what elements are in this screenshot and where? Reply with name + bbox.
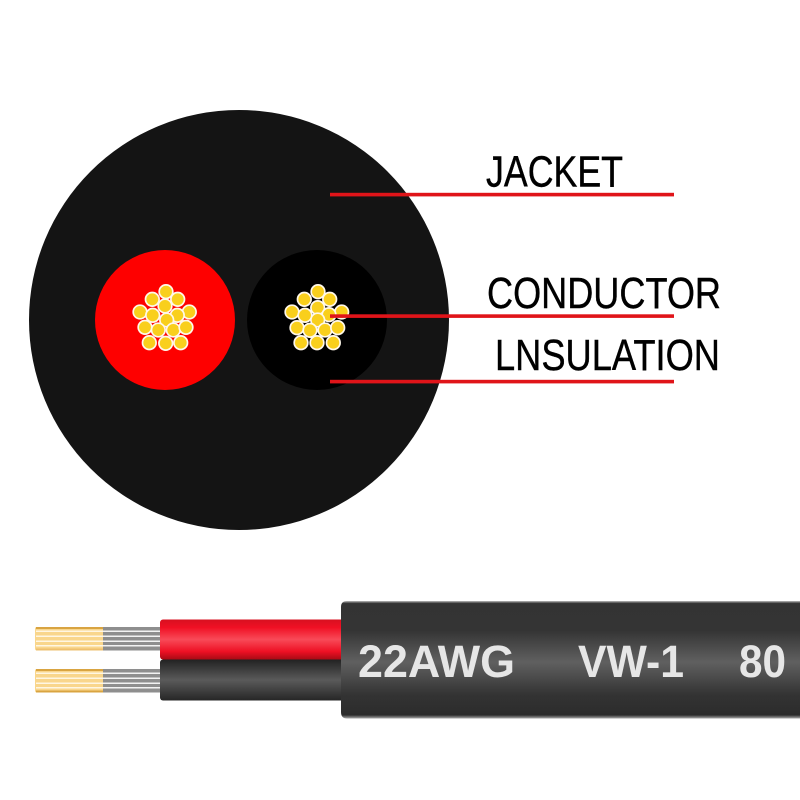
- print: 80: 80: [739, 636, 786, 687]
- jacket circle: [29, 110, 449, 530]
- upper copper strands: [35, 627, 161, 650]
- cable cross-section: [29, 110, 449, 530]
- leader line: jacket: [330, 193, 674, 196]
- print: 22AWG: 22AWG: [358, 636, 515, 687]
- label: jacket: JACKET: [486, 148, 623, 196]
- label: insulation: LNSULATION: [495, 331, 720, 380]
- print: VW-1: VW-1: [578, 636, 684, 687]
- outer jacket: [341, 601, 800, 718]
- black wire: [160, 660, 344, 700]
- cable side view: [35, 601, 800, 718]
- red insulated core: [95, 250, 235, 390]
- leader line: insulation: [330, 380, 674, 383]
- leader line: conductor: [330, 314, 674, 318]
- red wire: [160, 620, 344, 660]
- lower copper strands: [35, 669, 161, 692]
- label: conductor: CONDUCTOR: [487, 269, 721, 318]
- black insulated core: [247, 250, 387, 390]
